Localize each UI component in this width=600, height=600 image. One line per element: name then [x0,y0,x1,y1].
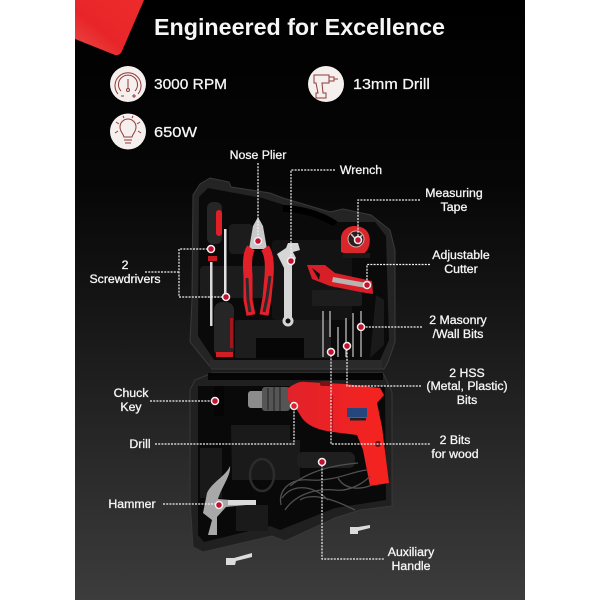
callout: HSS bits: 2 HSS [449,366,485,380]
drill chuck [248,387,290,411]
power cord and ring handle [250,459,372,510]
callout: masonry bits: 2 Masonry [429,313,488,327]
spec: 650W [110,114,198,150]
spec: 650W: 650W [154,124,198,141]
title: Engineered for Excellence [154,14,445,40]
toolbox upper half [190,178,395,369]
callout: drill [129,402,298,451]
latches [226,525,370,565]
callout: bits for wood [328,348,479,461]
spec: 13mm Drill: 13mm Drill [353,76,430,93]
measuring tape [341,226,370,258]
callout: adjustable cutter [364,248,490,288]
screwdriver with black handle [214,229,234,357]
callout: screwdrivers [89,246,230,300]
red power drill [288,381,389,486]
callout: adjustable cutter: Adjustable [432,248,490,262]
hammer [203,466,256,535]
callout: nose plier: Nose Plier [230,148,286,162]
callout: nose plier [230,148,286,244]
callout: hammer: Hammer [108,497,156,511]
adjustable wrench [277,243,300,326]
spec: 13mm Drill [308,66,430,102]
callout: measuring tape [354,186,483,244]
callout: wrench: Wrench [340,163,382,177]
spec: 3000 RPM: 3000 RPM [154,76,227,93]
callout: masonry bits: /Wall Bits [433,327,483,341]
screwdriver with red handle [207,202,222,326]
red corner accent [75,0,144,55]
callout: screwdrivers: 2 [122,258,129,272]
spec: 3000 RPM [110,66,227,102]
callout: HSS bits: (Metal, Plastic) [426,379,508,393]
callout: chuck key: Chuck [114,386,149,400]
callout: wrench [288,163,382,264]
callout: bits for wood: for wood [431,447,479,461]
callout: auxiliary handle: Auxiliary [388,545,435,559]
callout: auxiliary handle [318,458,435,573]
callout: chuck key: Key [120,400,142,414]
callout: HSS bits: Bits [457,393,477,407]
callout: bits for wood: 2 Bits [440,433,470,447]
drill bits [323,311,361,357]
callout: screwdrivers: Screwdrivers [89,272,161,286]
callout: measuring tape: Tape [441,200,467,214]
toolbox lower half [190,373,392,552]
callout: masonry bits [358,313,488,341]
nose plier [247,217,270,315]
callout: adjustable cutter: Cutter [444,262,478,276]
callout: hammer [108,497,222,511]
callout: drill: Drill [129,437,151,451]
callout: auxiliary handle: Handle [392,559,431,573]
callout: HSS bits [344,342,508,407]
panel: black background [75,0,525,600]
callout: measuring tape: Measuring [425,186,483,200]
callout: chuck key [114,386,218,414]
adjustable cutter [307,265,373,294]
